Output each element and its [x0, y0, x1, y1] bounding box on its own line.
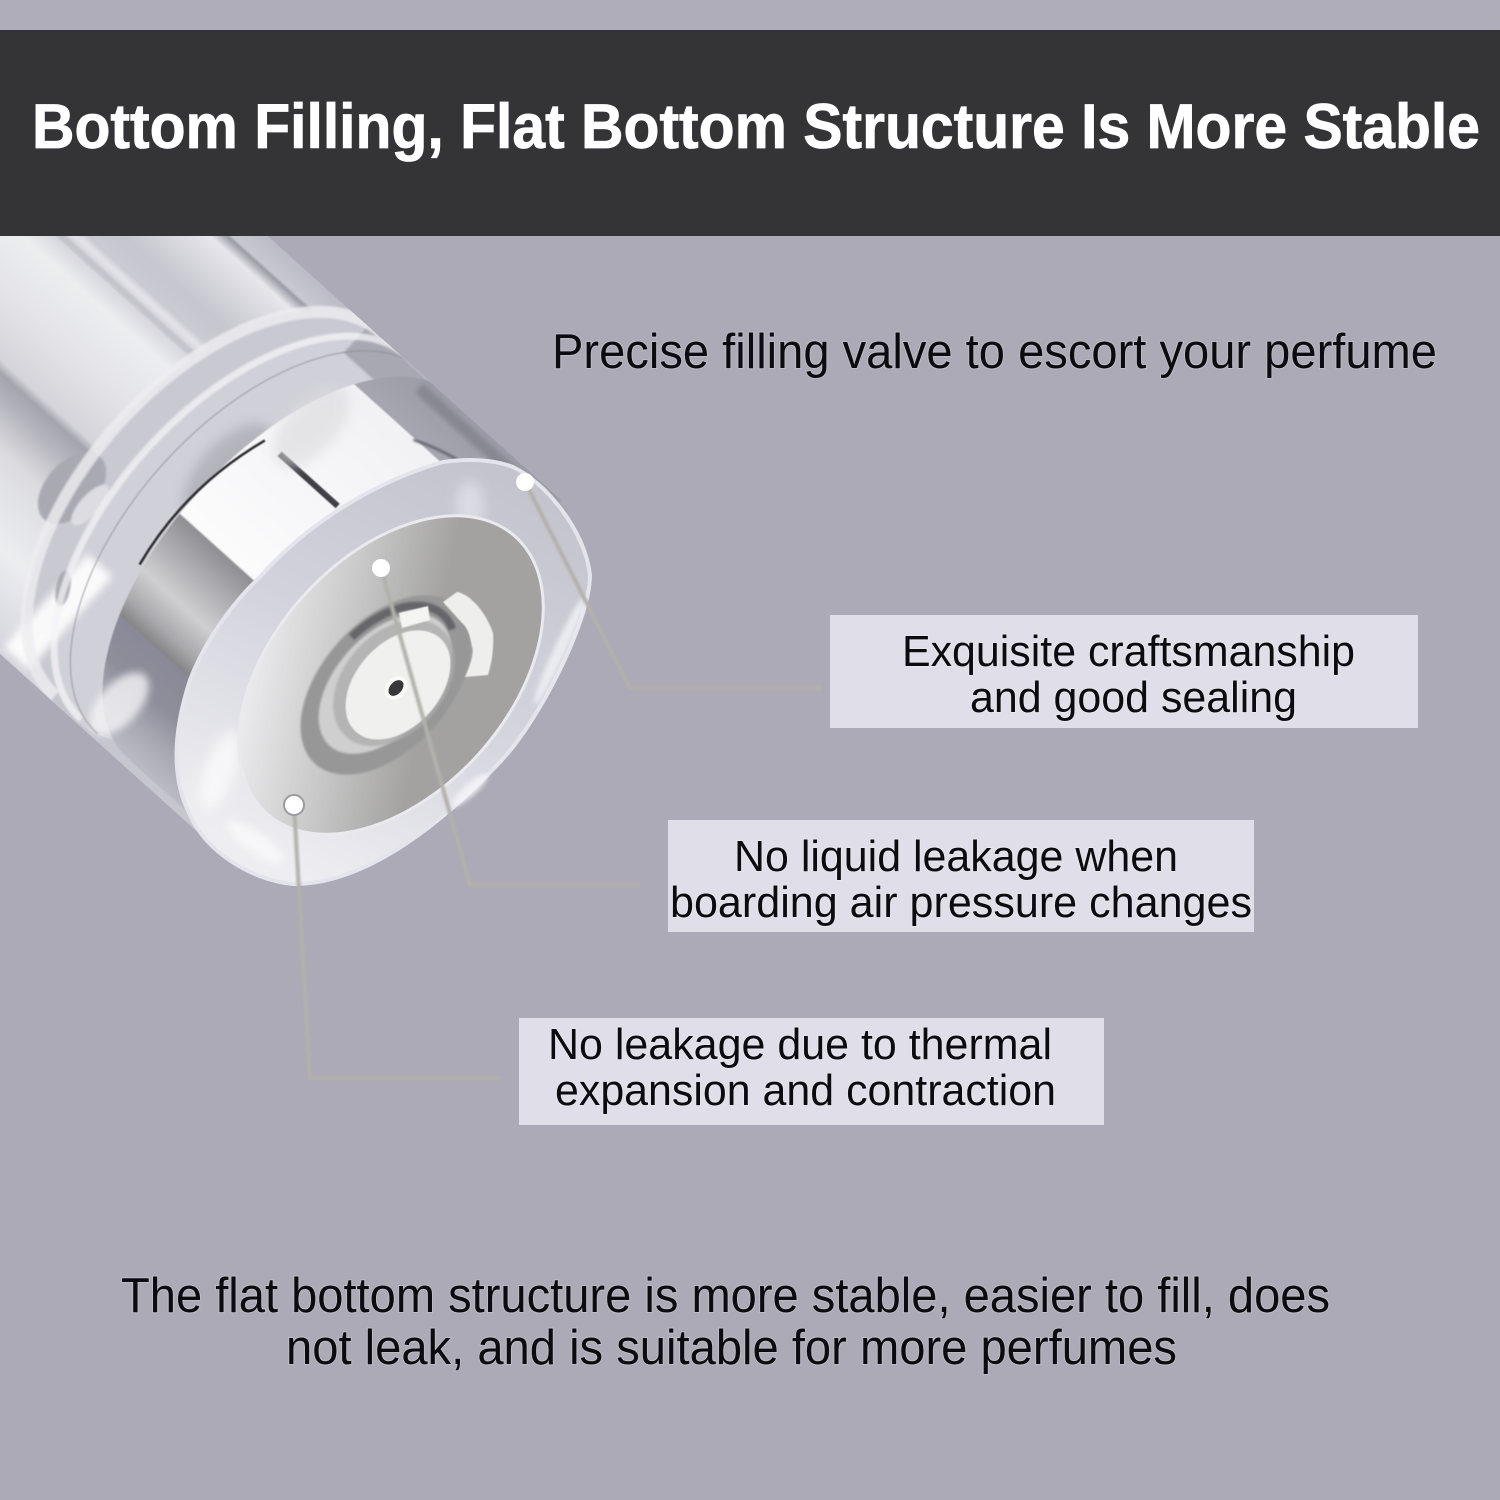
marker dot 1 [516, 473, 534, 491]
central valve [268, 563, 504, 807]
bottom summary [121, 1269, 1330, 1375]
callout: air pressure: No liquid leakage when [734, 832, 1178, 881]
perfume bottle bottom [0, 236, 592, 886]
leader line 1 [525, 482, 822, 688]
header band [0, 30, 1500, 236]
callout: air pressure [668, 820, 1254, 932]
callout: thermal: expansion and contraction [555, 1066, 1056, 1115]
grey inner disc [179, 458, 603, 892]
marker dot 2 [372, 559, 390, 577]
bottle tube [0, 236, 348, 700]
white highlight [399, 606, 430, 628]
rim face [176, 460, 590, 884]
callout: craftsmanship: Exquisite craftsmanship [902, 627, 1355, 676]
leader line 3 [294, 805, 500, 1078]
valve caption: Precise filling valve to escort your perfume [552, 325, 1437, 379]
callout: craftsmanship: and good sealing [970, 673, 1297, 722]
bottom summary: The flat bottom structure is more stable, easier to fill, does [121, 1269, 1330, 1323]
nub [25, 439, 119, 607]
collar rings [22, 305, 405, 734]
callout: thermal [519, 1018, 1104, 1125]
leader line 2 [381, 568, 640, 885]
callout: craftsmanship [830, 615, 1418, 728]
top strip [0, 0, 1500, 30]
transparent collar [4, 315, 430, 832]
arc highlight [443, 592, 493, 677]
marker dot 3 [284, 795, 304, 815]
valve hole [380, 672, 412, 704]
rim mottling [191, 481, 591, 870]
callout: thermal: No leakage due to thermal [548, 1020, 1052, 1069]
callout: air pressure: boarding air pressure changes [670, 878, 1252, 927]
bottom summary: not leak, and is suitable for more perfumes [286, 1321, 1177, 1375]
inner metal sleeve [88, 378, 561, 808]
